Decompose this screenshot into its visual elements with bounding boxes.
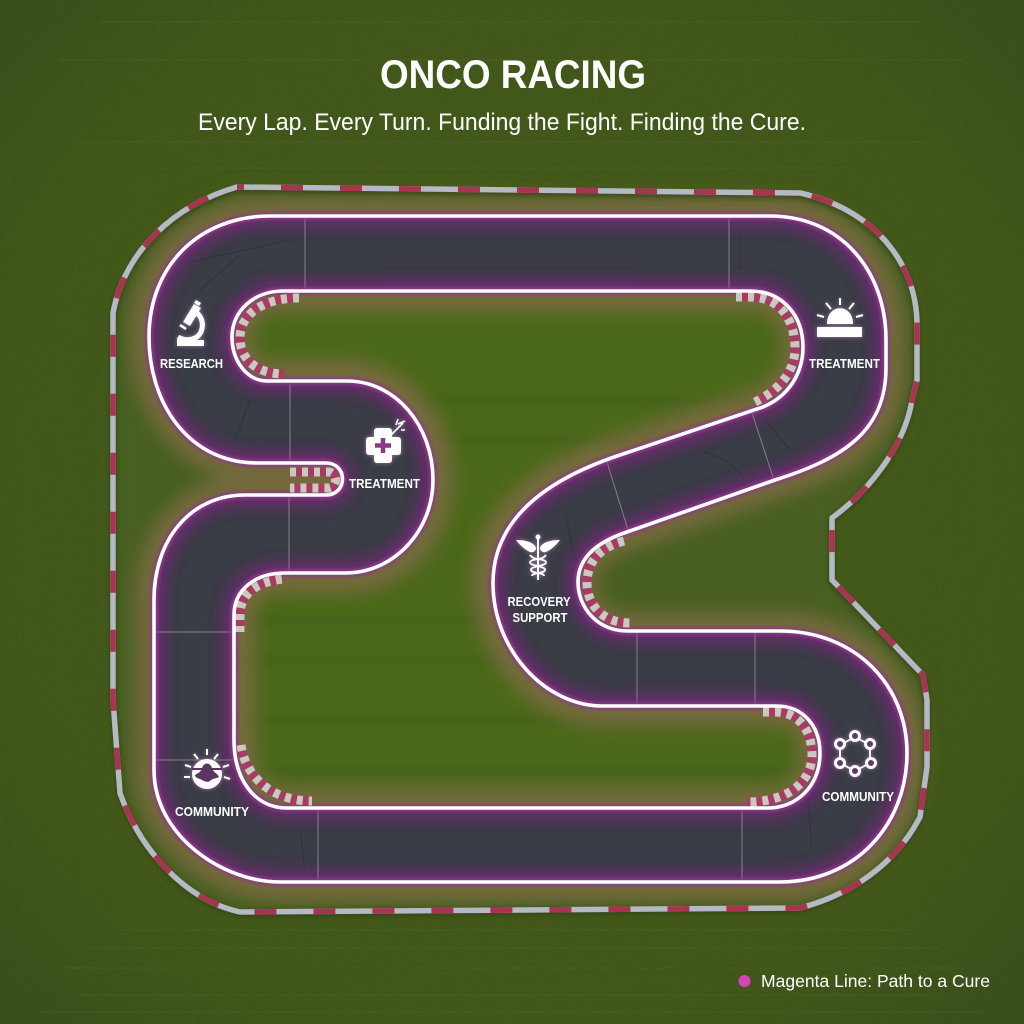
icon: sun over block <box>817 298 863 337</box>
icon: sun with figure <box>184 749 230 789</box>
stop: treatment, radiation <box>809 298 880 371</box>
legend <box>738 971 990 991</box>
subtitle: Every Lap. Every Turn. Funding the Fight. Finding the Cure. <box>198 109 806 136</box>
asphalt track surface <box>151 218 905 880</box>
stop: research <box>160 300 223 371</box>
stop: treatment, targeted <box>349 419 420 491</box>
title: ONCO RACING <box>380 53 646 97</box>
grass infield inside barrier <box>118 264 916 907</box>
stop: community, right <box>822 732 895 804</box>
icon: microscope <box>177 300 204 346</box>
track verge <box>149 216 907 882</box>
barrier: red and white guard rail <box>113 187 927 914</box>
icon: medical cross with arrow <box>366 419 405 463</box>
icon: caduceus <box>516 534 560 580</box>
label: community: COMMUNITY <box>822 790 895 804</box>
label: community: COMMUNITY <box>175 805 250 819</box>
stop: recovery support <box>508 534 571 625</box>
label: treatment: TREATMENT <box>349 477 420 491</box>
magenta glow along track edges <box>149 216 907 882</box>
label: research: RESEARCH <box>160 357 223 371</box>
label: treatment: TREATMENT <box>809 357 880 371</box>
stop: recovery support: SUPPORT <box>512 611 568 625</box>
sector lines <box>154 216 775 882</box>
label: recovery support: RECOVERY <box>508 595 571 609</box>
white track edge lines <box>149 216 907 882</box>
legend text: Magenta Line: Path to a Cure <box>761 971 990 991</box>
icon: ring of people <box>836 732 876 776</box>
legend dot <box>738 975 750 987</box>
stop: community, left <box>175 749 250 819</box>
kerbs: red and white corner markers <box>240 297 812 802</box>
